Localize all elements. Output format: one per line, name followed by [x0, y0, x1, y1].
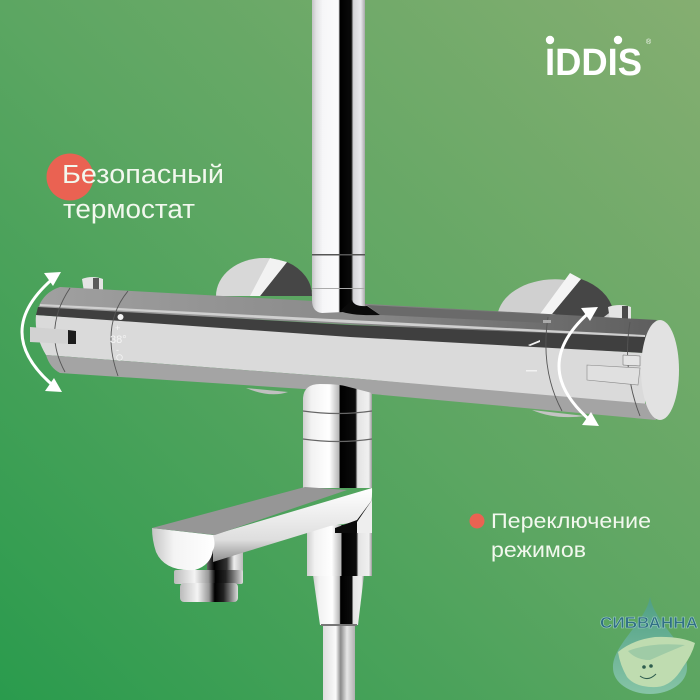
arrow: left rotation	[22, 272, 62, 392]
aerator	[174, 548, 243, 602]
spout	[152, 487, 372, 602]
temperature scale: +	[115, 323, 120, 333]
callout marker: modes	[470, 514, 484, 528]
highlight line	[40, 304, 645, 337]
water drop	[613, 597, 687, 694]
heading: thermostat callout: Безопасный	[62, 161, 224, 189]
watermark name: СИБВАННА	[600, 615, 698, 632]
arrow: right rotation	[559, 307, 599, 426]
heading: modes callout: Переключение	[491, 509, 651, 533]
bathtub	[618, 637, 695, 687]
logo: IDDIS: ®	[646, 38, 652, 46]
callout marker: thermostat	[46, 154, 94, 200]
wall plate: left	[216, 258, 312, 296]
thermostat body	[36, 287, 679, 420]
temperature scale: 38°	[110, 334, 127, 346]
wall plate shadows below body	[246, 388, 585, 417]
heading: modes callout	[491, 509, 651, 562]
right end cap	[641, 320, 679, 420]
left handle	[30, 327, 76, 344]
body top grey	[38, 287, 657, 340]
spout top face	[152, 487, 347, 535]
mode knob button	[608, 305, 631, 322]
middle riser	[303, 384, 372, 488]
heading: thermostat callout: термостат	[63, 196, 195, 224]
spout outlet column	[335, 500, 372, 533]
dark band	[36, 307, 645, 353]
wall plate: right	[498, 273, 613, 320]
temperature scale	[110, 314, 127, 360]
mode icons	[526, 320, 551, 372]
body lower grey	[46, 355, 656, 420]
heading: thermostat callout	[62, 161, 224, 224]
seam lines	[55, 288, 640, 416]
upper vertical pipe	[312, 0, 380, 315]
spout front	[152, 528, 214, 570]
temperature knob button	[82, 277, 103, 294]
right handle	[587, 355, 640, 385]
body light middle	[36, 315, 645, 405]
spout side	[213, 488, 372, 562]
temperature scale: -	[116, 345, 119, 355]
watermark: Sibvanna	[600, 597, 698, 694]
shelf behind pipe	[367, 305, 550, 323]
heading: modes callout: режимов	[491, 538, 586, 562]
hose and lower riser	[307, 525, 372, 700]
bathtub face	[640, 664, 656, 679]
logo: IDDIS: IDDIS	[545, 42, 642, 84]
